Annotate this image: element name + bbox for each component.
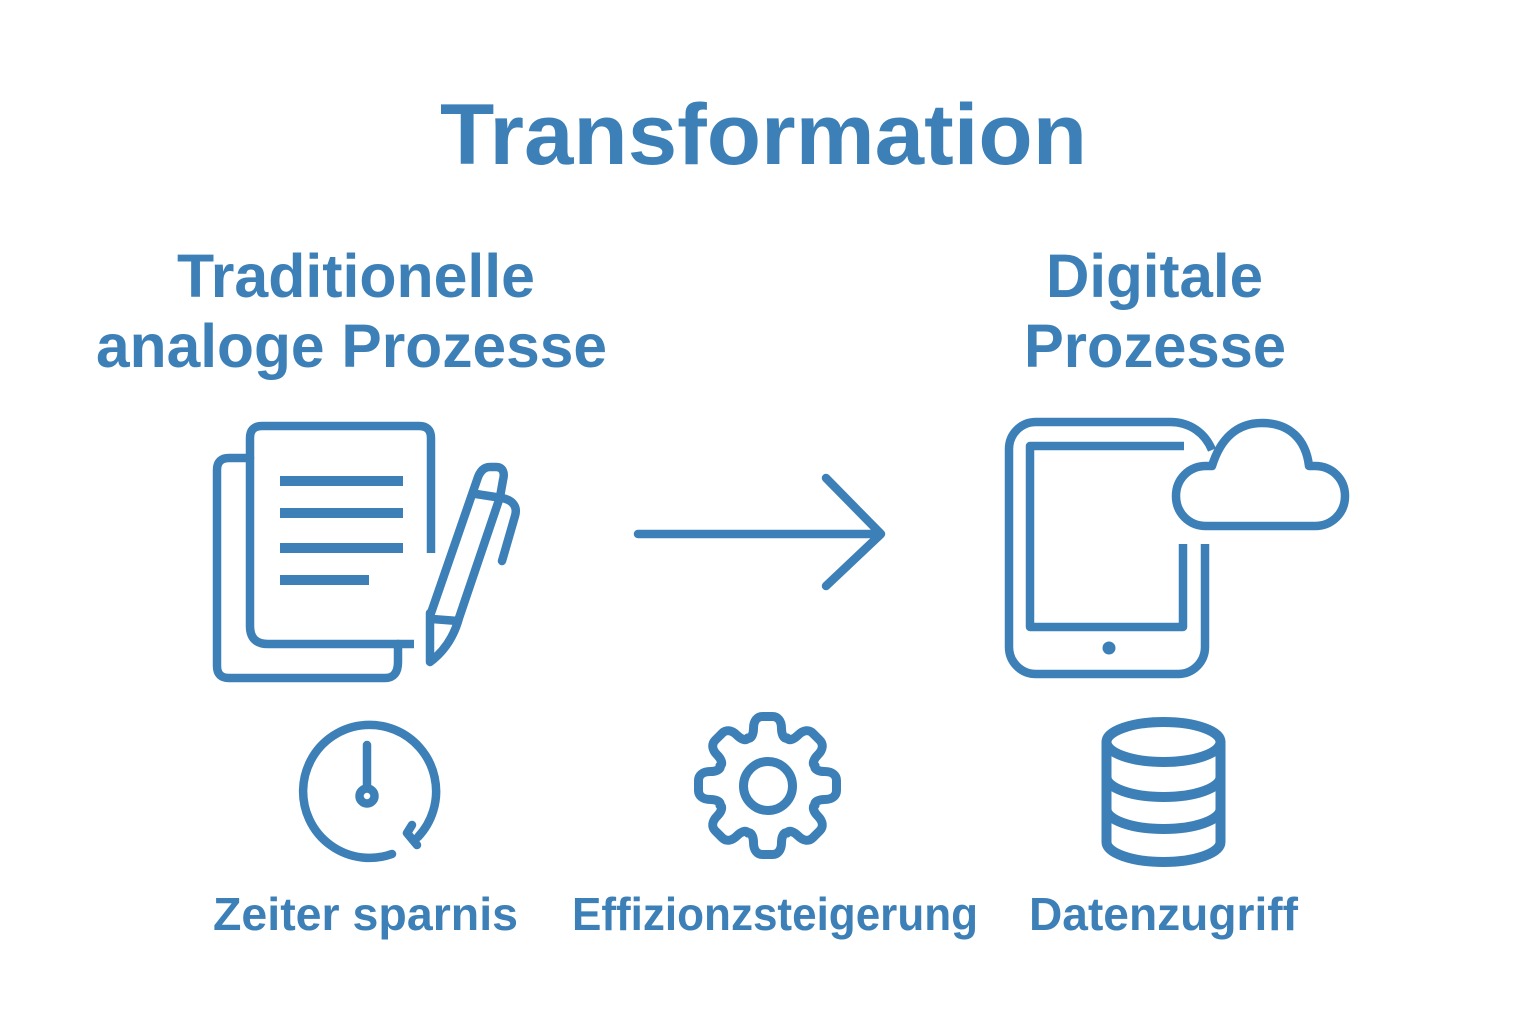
back page (217, 458, 398, 678)
heading: digital processes (1024, 242, 1286, 380)
label: efficiency increase: Effizionzsteigerung (572, 888, 978, 940)
icon: gear (698, 716, 836, 854)
icon: tablet with cloud (1009, 422, 1345, 674)
tablet screen (1030, 446, 1184, 627)
label: data access: Datenzugriff (1029, 888, 1299, 940)
cloud (1176, 423, 1345, 526)
arrowhead (407, 825, 417, 845)
heading: digital processes: Digitale (1046, 242, 1263, 310)
label: time saving: Zeiter sparnis (213, 888, 518, 940)
clock circle (303, 725, 436, 858)
heading: traditional analog processes (96, 242, 607, 380)
text lines (280, 481, 403, 580)
hub (360, 788, 374, 804)
home button (1102, 642, 1116, 654)
heading: traditional analog processes: Traditionelle (177, 242, 535, 310)
icon: clock with return arrow (303, 725, 436, 858)
clock hand (363, 745, 371, 788)
arrow (638, 478, 881, 586)
heading: digital processes: Prozesse (1024, 312, 1286, 380)
icon: paper documents and pen (217, 426, 516, 678)
title: Transformation (440, 87, 1087, 183)
heading: traditional analog processes: analoge Prozesse (96, 312, 607, 380)
pen (430, 467, 516, 662)
front page (250, 426, 431, 644)
tablet body (1009, 422, 1212, 674)
icon: database (1106, 722, 1220, 862)
